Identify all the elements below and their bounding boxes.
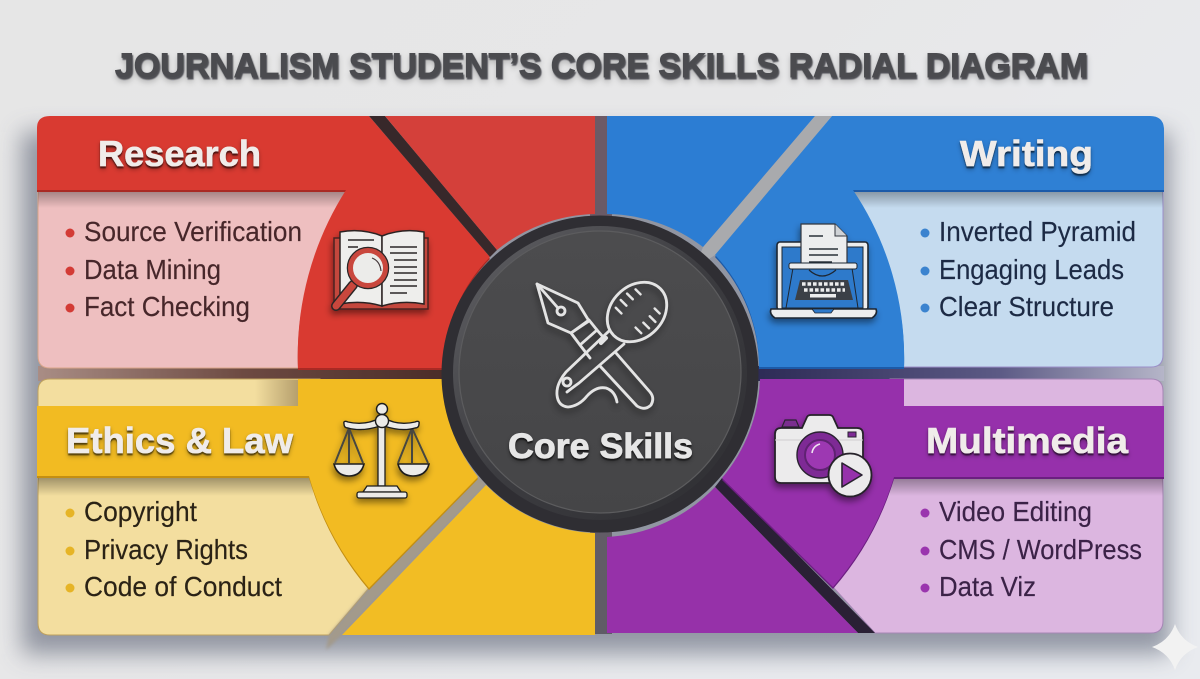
research heading: Research [98,133,261,174]
writing list background [840,190,1163,367]
writing heading: Writing [960,133,1093,174]
writing list: Clear Structure [939,291,1114,322]
icon: typewriter on laptop [770,224,876,318]
title: JOURNALISM STUDENT’S CORE SKILLS RADIAL DIAGRAM [115,47,1088,85]
ethics heading: Ethics & Law [66,420,294,461]
research list: Fact Checking [84,291,250,322]
research list: Source Verification [84,216,302,247]
multimedia gap [715,478,875,633]
multimedia heading: Multimedia [926,420,1129,461]
ethics list: Privacy Rights [84,534,248,565]
ethics list: Code of Conduct [84,571,282,602]
icon: sparkle watermark [1152,624,1198,670]
ethics wedge [342,485,595,635]
multimedia list: Video Editing [939,496,1092,527]
ethics list [66,496,282,602]
panel: research [37,116,595,370]
writing list [920,216,1136,322]
panel: writing [607,116,1164,369]
writing list: Inverted Pyramid [939,216,1136,247]
central hub [442,216,758,532]
research gap [369,116,497,257]
research list [66,216,302,322]
icon: scales of justice [334,404,429,498]
multimedia list [920,496,1142,602]
research wedge [385,116,595,250]
research header and arc block [37,116,490,370]
panel: ethics and law [37,379,595,650]
icon: fountain pen and microphone [537,270,679,408]
multimedia list: CMS / WordPress [939,534,1142,565]
multimedia wedge [607,487,858,633]
research list background [38,190,350,368]
ethics header and arc block [37,379,478,590]
writing list: Engaging Leads [939,254,1124,285]
multimedia header and arc block [722,379,1164,589]
writing gap [695,116,832,268]
research list: Data Mining [84,254,221,285]
panel: multimedia [607,379,1164,633]
multimedia list: Data Viz [939,571,1036,602]
ethics gap [326,477,486,650]
icon: open book with magnifier [334,231,428,309]
hub label: Core Skills [508,427,693,466]
hub disc [459,231,741,513]
writing header and arc block [715,116,1164,369]
icon: camera with play button [775,415,872,496]
writing wedge [607,116,815,247]
multimedia list background [833,379,1163,633]
ethics list background [38,379,369,635]
ethics list: Copyright [84,496,197,527]
hub outer ring [442,216,758,532]
